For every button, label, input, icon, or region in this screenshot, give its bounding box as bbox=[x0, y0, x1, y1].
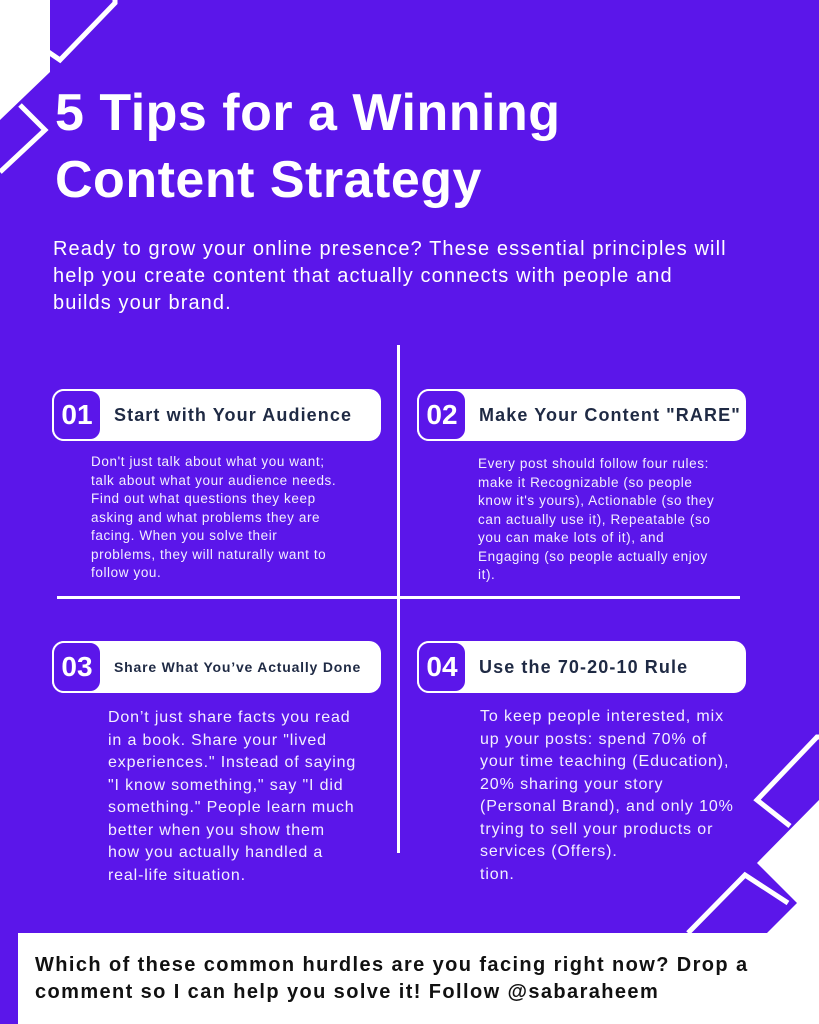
decoration: top-left shapes bbox=[0, 0, 118, 174]
tip 01 text: follow you. bbox=[91, 565, 161, 580]
title: Content Strategy bbox=[55, 151, 482, 209]
tip 03 text: how you actually handled a bbox=[108, 844, 323, 861]
tip 04 text: 20% sharing your story bbox=[480, 776, 663, 792]
intro text bbox=[53, 238, 727, 314]
tip 02 text: know it's yours), Actionable (so they bbox=[478, 493, 714, 508]
tip 04 header: Use the 70-20-10 Rule bbox=[479, 657, 688, 677]
tip 01 text bbox=[91, 454, 336, 580]
tip 03 text: better when you show them bbox=[108, 822, 325, 838]
dividers bbox=[397, 345, 400, 853]
tip 03 header: 03 bbox=[61, 651, 93, 682]
tip 02 text: it). bbox=[478, 567, 495, 582]
footer call to action: comment so I can help you solve it! Follow @sabaraheem bbox=[35, 981, 659, 1003]
tip 04 text: up your posts: spend 70% of bbox=[480, 730, 707, 748]
tip 02 header bbox=[417, 389, 746, 441]
tip 03 text: experiences." Instead of saying bbox=[108, 754, 356, 771]
tip 01 header bbox=[52, 389, 381, 441]
tip 03 header: Share What You’ve Actually Done bbox=[114, 659, 361, 675]
tip 02 text: make it Recognizable (so people bbox=[478, 474, 692, 490]
tip 04 text: To keep people interested, mix bbox=[480, 708, 724, 725]
tip 01 header: 01 bbox=[61, 399, 93, 430]
tip 03 text: something." People learn much bbox=[108, 799, 354, 816]
decoration: bottom-right shapes bbox=[686, 734, 819, 933]
tip 02 text: can actually use it), Repeatable (so bbox=[478, 512, 710, 526]
tip 04 text bbox=[480, 708, 734, 882]
tip 02 text: you can make lots of it), and bbox=[478, 530, 664, 545]
tip 04 header: 04 bbox=[426, 651, 458, 682]
tip 02 header: 02 bbox=[426, 399, 458, 430]
tip 01 text: Don't just talk about what you want; bbox=[91, 454, 325, 469]
tip 04 text: services (Offers). bbox=[480, 843, 618, 860]
title: 5 Tips for a Winning bbox=[55, 84, 560, 142]
tip 01 text: talk about what your audience needs. bbox=[91, 472, 336, 488]
tip 04 text: trying to sell your products or bbox=[480, 820, 713, 838]
tip 02 text: Every post should follow four rules: bbox=[478, 456, 709, 471]
tip 04 text: tion. bbox=[480, 866, 515, 882]
tip 01 text: problems, they will naturally want to bbox=[91, 546, 326, 562]
tip 02 text bbox=[478, 456, 714, 582]
tip 01 text: asking and what problems they are bbox=[91, 510, 320, 524]
tip 04 text: (Personal Brand), and only 10% bbox=[480, 798, 734, 815]
tip 04 text: your time teaching (Education), bbox=[480, 753, 729, 770]
tip 03 text: "I know something," say "I did bbox=[108, 776, 344, 794]
tip 04 header bbox=[417, 641, 746, 693]
tip 03 text bbox=[108, 709, 356, 884]
tip 02 text: Engaging (so people actually enjoy bbox=[478, 548, 708, 564]
intro text: builds your brand. bbox=[53, 292, 232, 314]
tip 03 text: real-life situation. bbox=[108, 866, 246, 884]
tip 02 header: Make Your Content "RARE" bbox=[479, 405, 741, 425]
title bbox=[55, 84, 560, 209]
intro text: Ready to grow your online presence? These essential principles will bbox=[53, 238, 727, 260]
footer call to action bbox=[18, 933, 819, 1024]
intro text: help you create content that actually connects with people and bbox=[53, 265, 673, 287]
tip 01 header: Start with Your Audience bbox=[114, 405, 352, 425]
tip 01 text: facing. When you solve their bbox=[91, 528, 277, 543]
footer call to action: Which of these common hurdles are you facing right now? Drop a bbox=[35, 954, 749, 976]
tip 01 text: Find out what questions they keep bbox=[91, 491, 316, 506]
tip 03 text: in a book. Share your "lived bbox=[108, 732, 327, 748]
tip 03 header bbox=[52, 641, 381, 693]
tip 03 text: Don’t just share facts you read bbox=[108, 709, 350, 726]
